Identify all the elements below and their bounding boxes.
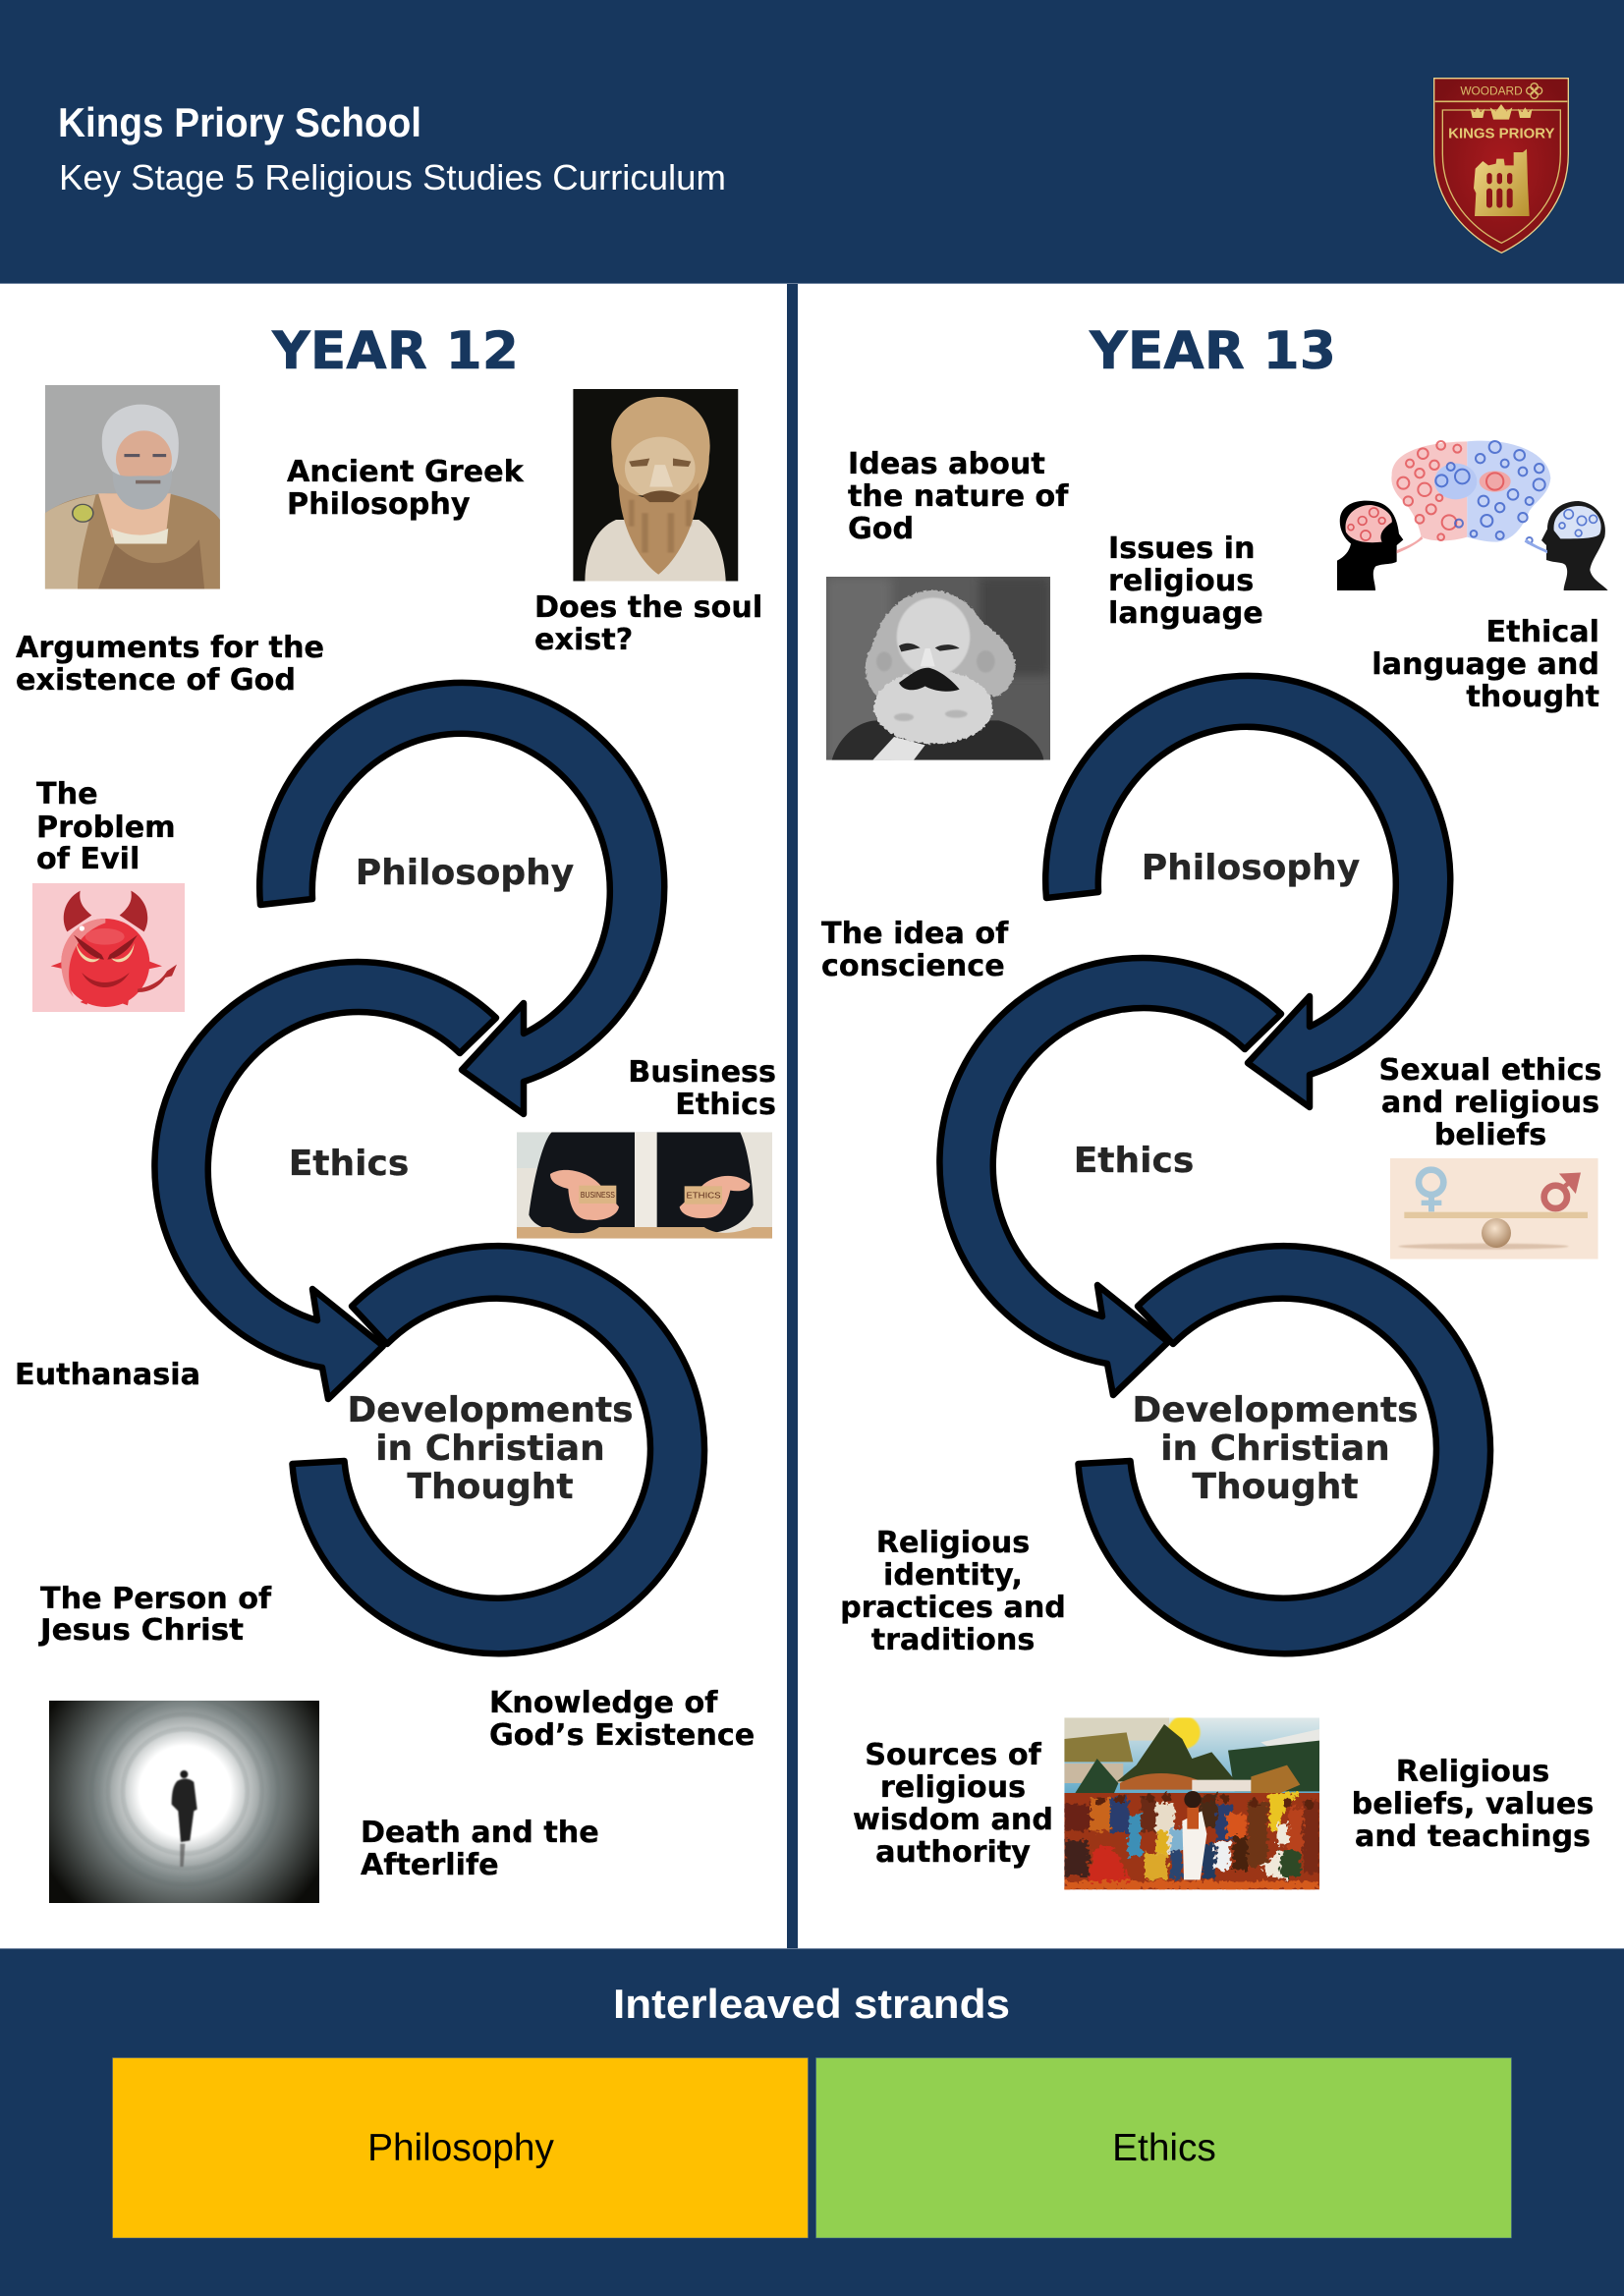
arrow: Philosophy xyxy=(1045,676,1450,1107)
image: Plato bust xyxy=(573,389,738,581)
panel: interleaved strands footer xyxy=(0,1948,1624,2296)
text: Issues in religious language: religious xyxy=(1108,564,1254,598)
text: Sexual ethics and religious beliefs: Sexual ethics xyxy=(1378,1053,1602,1088)
curriculum subtitle: Key Stage 5 Religious Studies Curriculum xyxy=(59,157,726,197)
text: Business Ethics: Ethics xyxy=(675,1088,776,1122)
image: Karl Marx portrait xyxy=(826,577,1050,760)
text: Sources of religious wisdom and authority: authority xyxy=(875,1835,1031,1870)
text: Ancient Greek Philosophy: Philosophy xyxy=(287,487,471,522)
arrow: Philosophy xyxy=(259,683,664,1114)
text: Ethical language and thought: thought xyxy=(1466,680,1599,714)
label: Ethics: Ethics xyxy=(1074,1141,1194,1181)
text: Religious beliefs, values and teachings: Religious xyxy=(1396,1755,1549,1789)
text: Ethical language and thought: language and xyxy=(1372,647,1599,682)
text: The Person of Jesus Christ: Jesus Christ xyxy=(38,1613,244,1648)
panel: column divider xyxy=(787,284,798,1949)
image: business and ethics hands xyxy=(517,1132,772,1239)
text: Issues in religious language: Issues in xyxy=(1108,532,1255,566)
school name: Kings Priory School xyxy=(58,99,421,145)
text: Ideas about the nature of God: the nature of xyxy=(848,479,1069,514)
image: two heads in conversation xyxy=(1337,439,1608,590)
arrow: Ethics xyxy=(154,962,496,1399)
text: The Person of Jesus Christ: The Person of xyxy=(40,1582,272,1616)
image: business and ethics hands: ETHICS xyxy=(686,1190,721,1200)
image: business and ethics hands: BUSINESS xyxy=(581,1190,615,1200)
icon: school shield xyxy=(1434,79,1568,252)
text: Religious identity, practices and traditions: traditions xyxy=(871,1623,1035,1657)
image: red devil xyxy=(32,883,185,1012)
arrow: Developments in Christian Thought xyxy=(293,1246,704,1653)
panel: year 12 xyxy=(15,321,776,1903)
text: Euthanasia: Euthanasia xyxy=(15,1358,200,1392)
text: Death and the Afterlife: Death and the xyxy=(361,1816,599,1850)
label: Developments in Christian Thought: Developments xyxy=(347,1390,634,1430)
text: Arguments for the existence of God: Arguments for the xyxy=(16,631,324,665)
label: Philosophy: Philosophy xyxy=(1142,848,1360,888)
header band xyxy=(0,0,1624,284)
panel: year 13 xyxy=(821,321,1608,1889)
text: Sexual ethics and religious beliefs: and religious xyxy=(1381,1086,1599,1120)
text: Sources of religious wisdom and authority: religious xyxy=(880,1770,1026,1805)
arrow: Developments in Christian Thought xyxy=(1079,1246,1490,1653)
text: Ancient Greek Philosophy: Ancient Greek xyxy=(287,455,525,489)
heading: year 12: YEAR 12 xyxy=(271,321,519,381)
text: The idea of conscience: The idea of xyxy=(821,917,1009,951)
text: Ideas about the nature of God: God xyxy=(848,512,914,546)
text: Knowledge of God's Existence: Knowledge of xyxy=(489,1686,718,1720)
text: Issues in religious language: language xyxy=(1108,596,1263,631)
label: Developments in Christian Thought: Thought xyxy=(407,1467,574,1507)
label: Philosophy: Philosophy xyxy=(356,853,574,893)
label: Developments in Christian Thought: Developments xyxy=(1132,1390,1419,1430)
label: Ethics: Ethics xyxy=(289,1144,409,1184)
text: Religious beliefs, values and teachings: and teachings xyxy=(1355,1820,1591,1854)
text: Business Ethics: Business xyxy=(628,1055,776,1090)
text: Sources of religious wisdom and authority: wisdom and xyxy=(853,1803,1053,1837)
label: Developments in Christian Thought: Thought xyxy=(1192,1467,1359,1507)
text: Religious identity, practices and traditions: Religious xyxy=(876,1526,1030,1560)
heading: Interleaved strands: Interleaved strands xyxy=(613,1981,1010,2027)
text: The Problem of Evil: The xyxy=(36,777,98,812)
text: Religious identity, practices and traditions: practices and xyxy=(840,1591,1066,1625)
image: crowd mural painting xyxy=(1064,1716,1319,1889)
text: Arguments for the existence of God: existence of God xyxy=(16,663,296,698)
text: Does the soul exist?: Does the soul xyxy=(534,590,762,625)
label: Developments in Christian Thought: in Christian xyxy=(1160,1428,1390,1469)
box: Ethics strand: Ethics xyxy=(1112,2127,1216,2169)
image: gender symbols balanced xyxy=(1390,1158,1598,1260)
arrow: Ethics xyxy=(939,958,1281,1395)
image: figure in tunnel of light xyxy=(49,1698,319,1903)
label: Developments in Christian Thought: in Christian xyxy=(375,1428,605,1469)
text: Death and the Afterlife: Afterlife xyxy=(361,1848,499,1882)
text: Ideas about the nature of God: Ideas about xyxy=(848,447,1045,481)
heading: year 13: YEAR 13 xyxy=(1089,321,1336,381)
image: Aristotle illustration xyxy=(45,385,220,589)
text: Sources of religious wisdom and authority: Sources of xyxy=(865,1738,1042,1772)
text: The idea of conscience: conscience xyxy=(821,949,1005,983)
text: Does the soul exist?: exist? xyxy=(534,623,633,657)
text: Knowledge of God's Existence: God’s Existence xyxy=(489,1718,755,1753)
box: Philosophy strand xyxy=(112,2057,808,2238)
text: The Problem of Evil: Problem xyxy=(36,811,176,845)
text: Sexual ethics and religious beliefs: beliefs xyxy=(1434,1118,1546,1152)
text: Religious beliefs, values and teachings: beliefs, values xyxy=(1352,1787,1594,1821)
box: Philosophy strand: Philosophy xyxy=(367,2127,554,2169)
box: Ethics strand xyxy=(815,2057,1511,2238)
text: Ethical language and thought: Ethical xyxy=(1485,615,1599,649)
text: Religious identity, practices and traditions: identity, xyxy=(883,1558,1023,1593)
icon: school shield: KINGS PRIORY xyxy=(1448,127,1555,142)
icon: school shield: WOODARD xyxy=(1460,85,1523,98)
text: The Problem of Evil: of Evil xyxy=(36,842,140,876)
